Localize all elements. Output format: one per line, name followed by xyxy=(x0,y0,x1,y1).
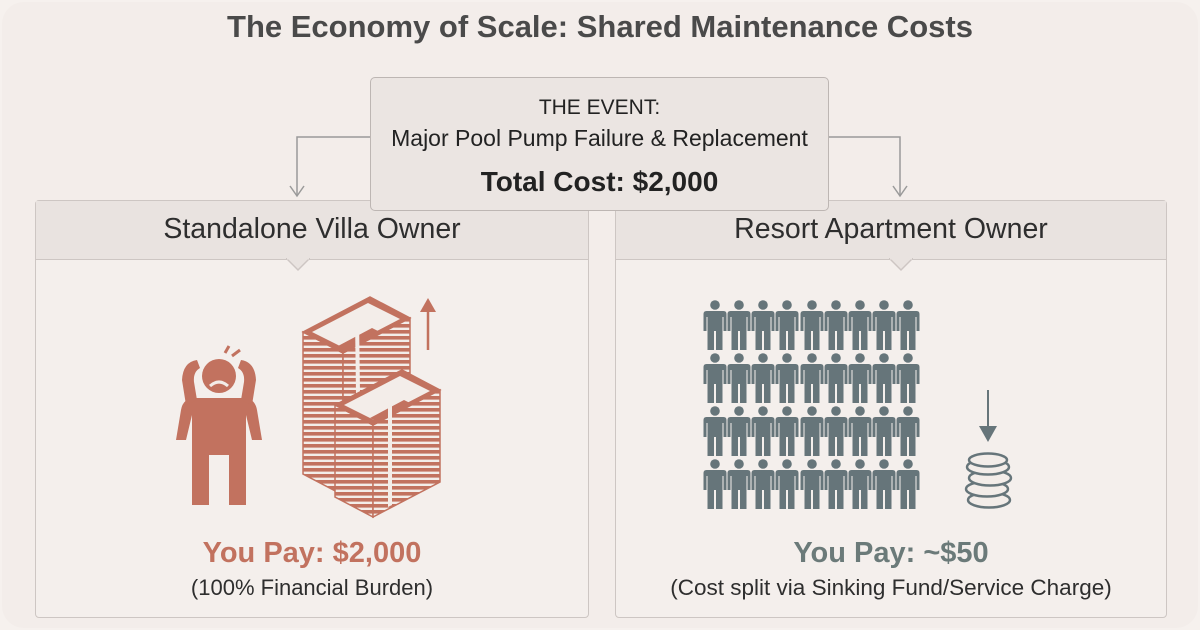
event description: Major Pool Pump Failure & Replacement xyxy=(391,125,808,151)
icon: arrow down xyxy=(979,390,997,442)
title: The Economy of Scale: Shared Maintenance Costs xyxy=(227,9,973,44)
event box xyxy=(370,77,829,211)
arrow: to right panel xyxy=(828,137,907,196)
panel: standalone villa owner xyxy=(35,200,589,618)
panel: resort apartment owner xyxy=(615,200,1167,618)
panel header xyxy=(616,201,1166,260)
icon: stressed person xyxy=(176,346,262,505)
text: you pay $2,000: You Pay: $2,000 xyxy=(203,537,421,569)
heading: standalone villa owner: Standalone Villa Owner xyxy=(163,213,461,245)
text: you pay ~$50: You Pay: ~$50 xyxy=(793,537,989,569)
arrow: to left panel xyxy=(290,137,370,196)
text: cost split: (Cost split via Sinking Fund/Service Charge) xyxy=(670,575,1112,600)
icon: money stacks xyxy=(303,297,440,517)
heading: resort apartment owner: Resort Apartment Owner xyxy=(734,213,1048,245)
icon: crowd of people (9x4) xyxy=(704,300,920,509)
pointer xyxy=(889,258,913,271)
event label: THE EVENT: xyxy=(539,96,660,119)
text: 100% financial burden: (100% Financial Burden) xyxy=(191,575,433,600)
pointer xyxy=(286,258,310,271)
icon: coins xyxy=(966,454,1011,508)
panel header xyxy=(36,201,588,260)
total cost: Total Cost: $2,000 xyxy=(481,166,718,197)
icon: arrow up xyxy=(420,298,436,350)
